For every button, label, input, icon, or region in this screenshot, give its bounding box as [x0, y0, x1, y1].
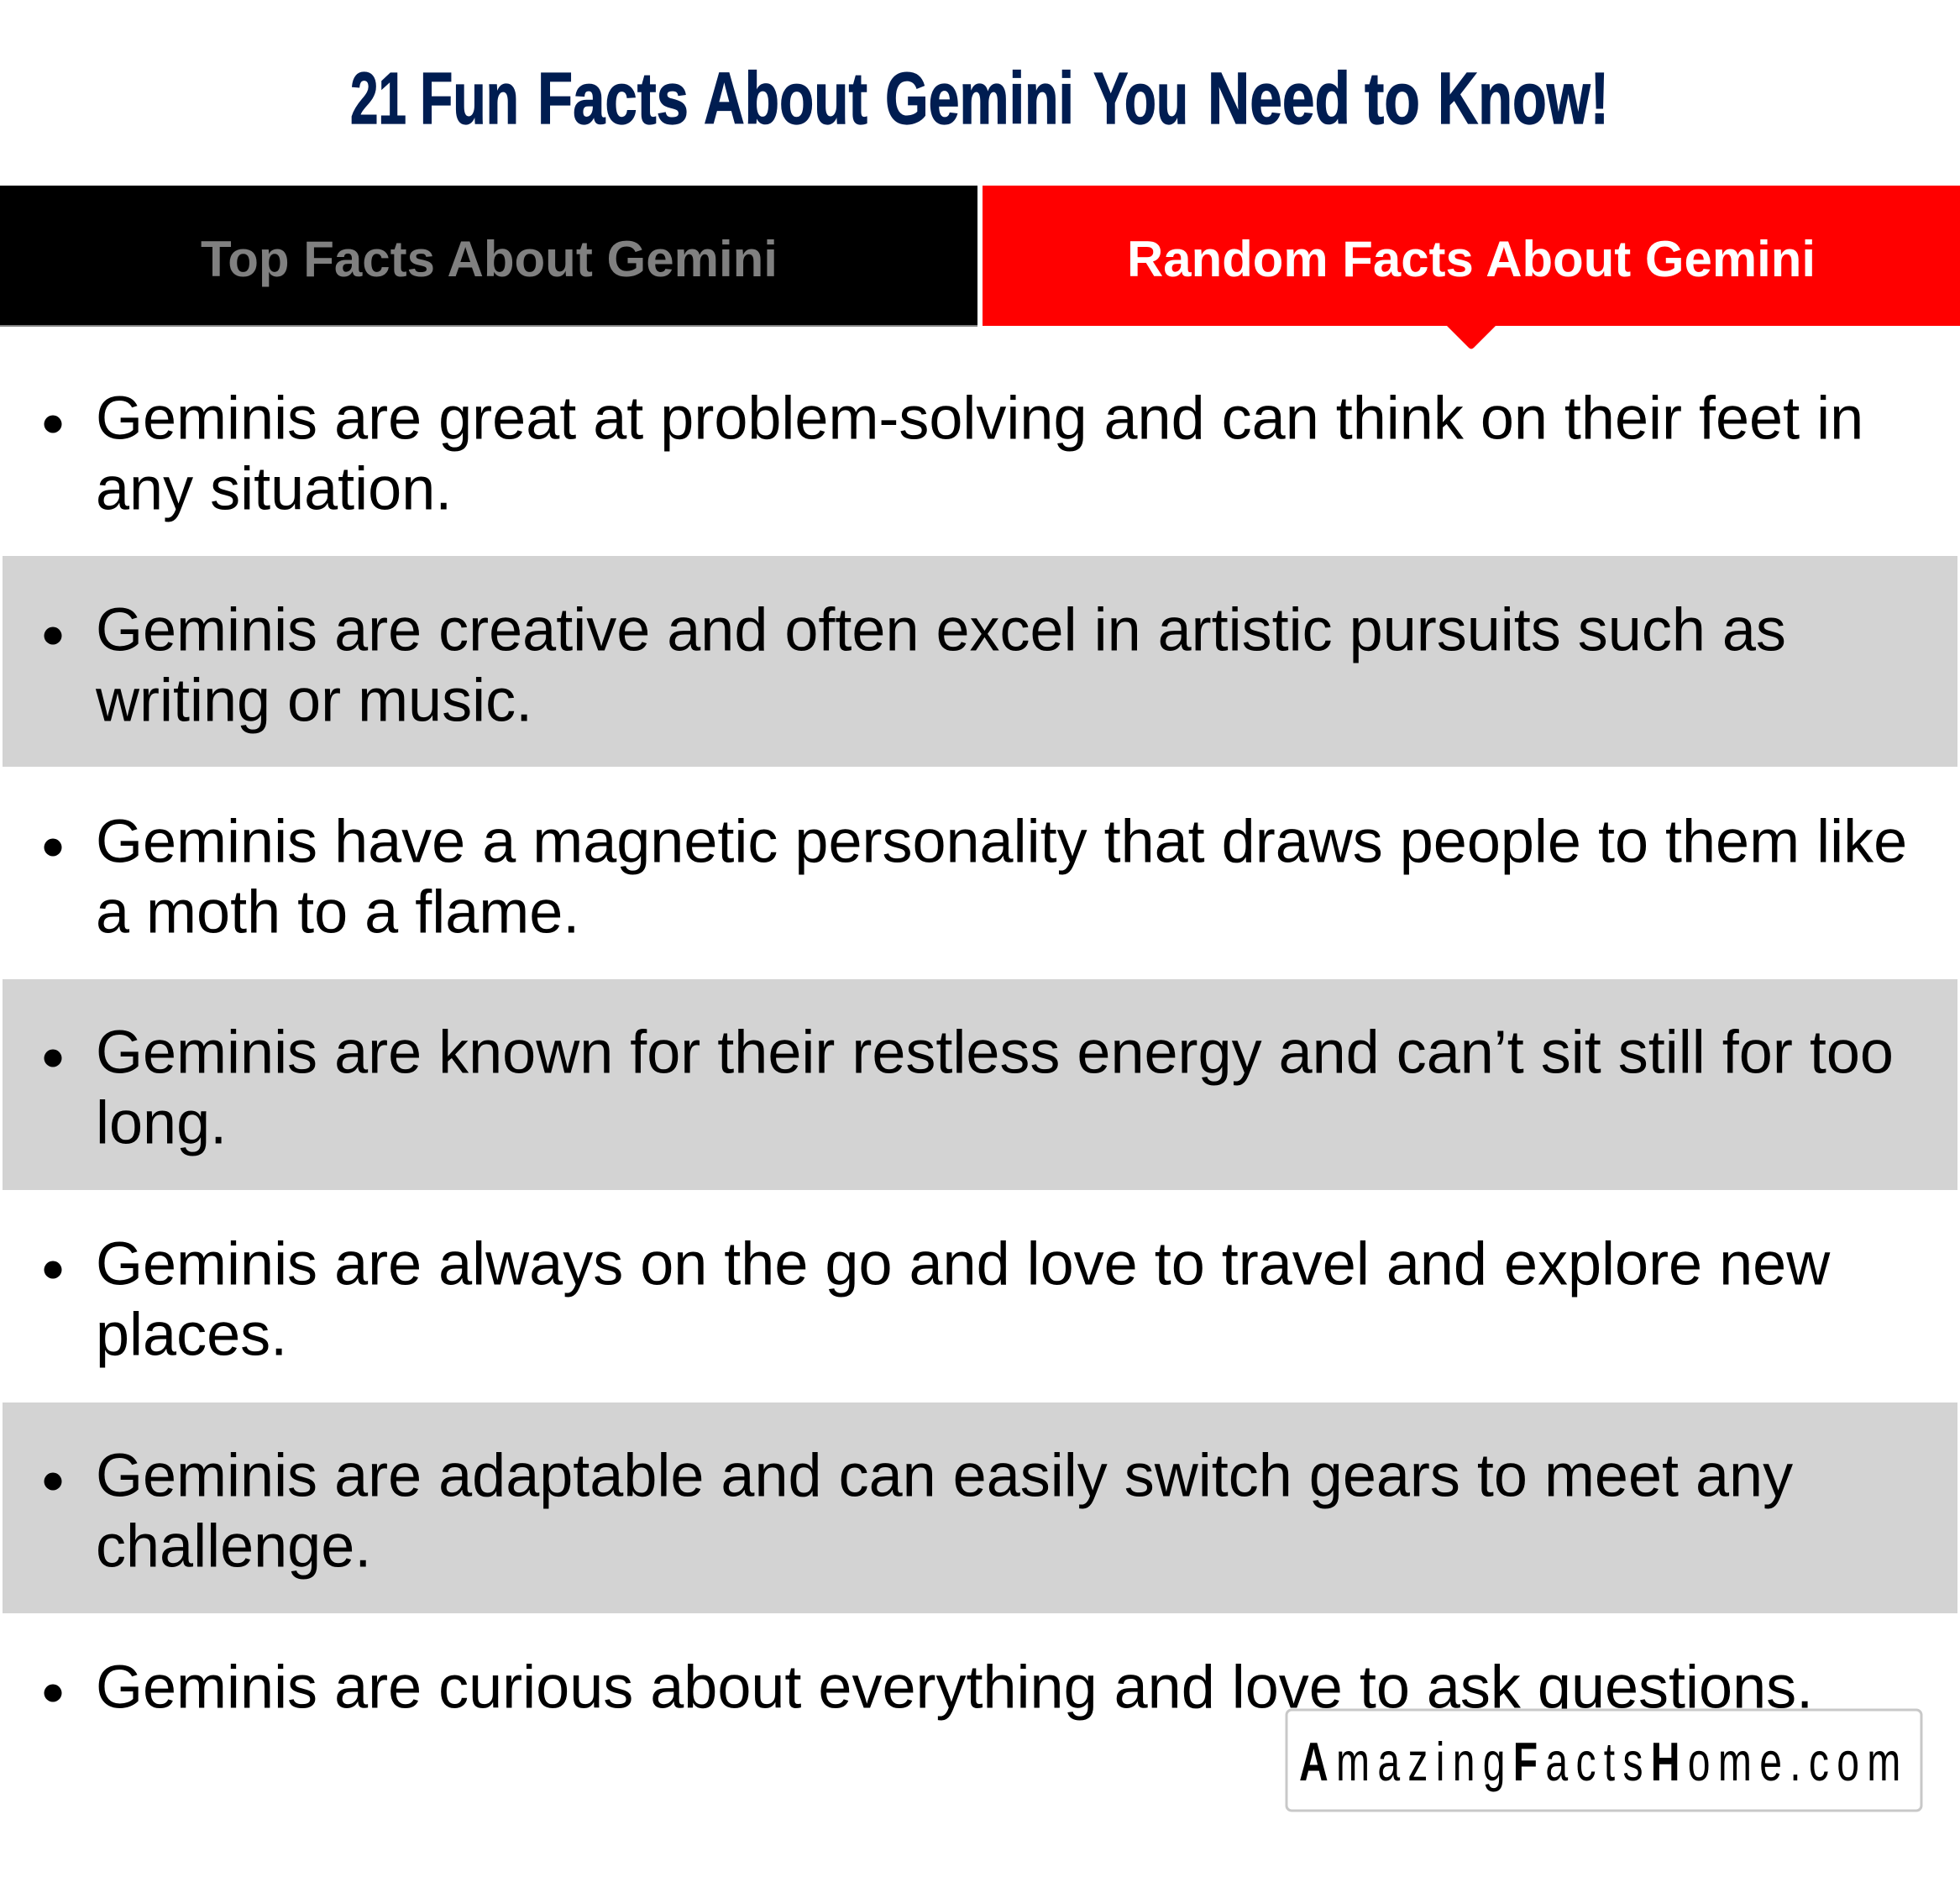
- watermark badge: [1287, 1710, 1921, 1811]
- fact row 7: Geminis are curious about everything and love to ask questions.: [96, 1654, 1813, 1722]
- fact row 2: writing or music.: [95, 667, 532, 734]
- fact row 5: Geminis are always on the go and love to travel and explore new: [96, 1231, 1831, 1298]
- title: to: [1365, 58, 1420, 139]
- watermark badge: AmazingFactsHome.com: [1299, 1732, 1900, 1793]
- title: You: [1093, 58, 1188, 139]
- fact row 6: [3, 1403, 1957, 1613]
- title: [350, 58, 1609, 139]
- fact row 3: [44, 808, 1907, 946]
- tab: top facts (inactive): Top Facts About Gemini: [201, 231, 778, 287]
- tab: random facts (active): Random Facts About Gemini: [1127, 231, 1816, 287]
- fact row 3: a moth to a flame.: [96, 878, 579, 946]
- title: Fun: [420, 58, 519, 139]
- tab: top facts (inactive): [0, 186, 977, 327]
- fact row 6: challenge.: [96, 1513, 371, 1581]
- fact row 4: [3, 979, 1957, 1190]
- title: Facts: [537, 58, 689, 139]
- fact row 4: long.: [96, 1090, 227, 1157]
- fact row 2: [3, 556, 1957, 767]
- fact row 4: Geminis are known for their restless energy and can’t sit still for too: [96, 1020, 1894, 1087]
- fact row 5: places.: [96, 1302, 287, 1369]
- tab: random facts (active): [983, 186, 1960, 349]
- fact row 1: Geminis are great at problem-solving and can think on their feet in: [96, 385, 1863, 452]
- fact row 5: [44, 1231, 1831, 1369]
- title: Know!: [1438, 58, 1609, 139]
- fact row 3: Geminis have a magnetic personality that draws people to them like: [96, 808, 1907, 875]
- fact row 6: Geminis are adaptable and can easily switch gears to meet any: [96, 1443, 1793, 1510]
- fact row 1: any situation.: [96, 455, 452, 522]
- title: About: [704, 58, 867, 139]
- title: Need: [1208, 58, 1350, 139]
- title: Gemini: [885, 58, 1074, 139]
- title: 21: [350, 58, 406, 139]
- fact row 1: [44, 385, 1863, 522]
- fact row 2: Geminis are creative and often excel in artistic pursuits such as: [96, 596, 1786, 663]
